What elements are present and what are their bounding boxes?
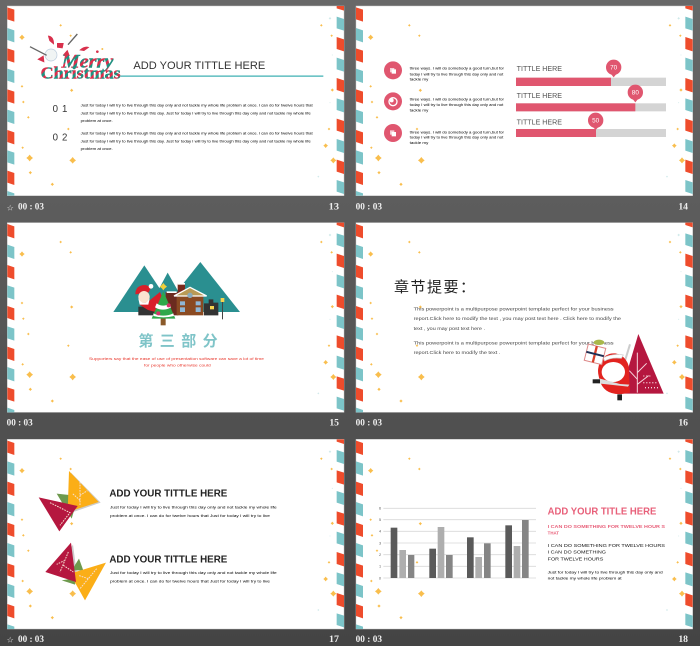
bar chart: 2 xyxy=(379,553,381,557)
bar chart: 4 xyxy=(379,530,381,534)
text block: capitals xyxy=(548,543,665,562)
text: item 2 xyxy=(410,98,505,112)
bar chart: 6 xyxy=(379,507,381,511)
text block: capitals: I CAN DO SOMETHING FOR TWELVE HOURS xyxy=(548,543,665,548)
bar 70: 70 xyxy=(610,65,618,72)
text block 1 xyxy=(110,506,277,518)
text: title 2: ADD YOUR TITTLE HERE xyxy=(109,554,228,565)
text: item 2: today I will try to live through this day only and not xyxy=(410,103,504,107)
footer: slide 18 xyxy=(356,634,689,644)
footer: slide 13: ☆ xyxy=(7,204,14,213)
pink subheading: THAT xyxy=(548,531,559,536)
text: item 1: today I will try to live through this day only and not xyxy=(410,72,504,76)
illustration: Santa with gift and triangle tree xyxy=(584,334,664,400)
slide 14: icons and progress bars xyxy=(356,6,693,212)
slide 17: two titled text blocks with triangles xyxy=(7,439,344,645)
heading: ADD YOUR TITLE HERE xyxy=(548,507,656,518)
text: item 1: tackle my xyxy=(410,78,428,82)
footer: slide 13: 13 xyxy=(329,202,340,212)
illustration: Santa, tree and houses under mountains xyxy=(113,262,240,325)
bar chart: 1 xyxy=(379,565,381,569)
bar 50: 50 xyxy=(592,118,600,125)
text block 02: Just for today I will try to live through this day only and not tackle my whole life problem at once. I can do for twelve hours that xyxy=(81,131,314,135)
pink subheading xyxy=(548,524,665,536)
bar chart: 0 xyxy=(379,576,381,580)
slide 15: section divider xyxy=(7,223,344,428)
text: item 3: three ways. I will do somebody a good turn,but for xyxy=(410,130,505,134)
slide 13: title and numbered list xyxy=(7,6,344,213)
text: item 3: today I will try to live through this day only and not xyxy=(410,136,504,140)
icon: pages xyxy=(384,124,402,142)
text: item 1: three ways. I will do somebody a good turn,but for xyxy=(410,67,505,71)
section subtitle: Supporters say that the ease of use of presentation software can save a lot of time xyxy=(89,357,264,361)
section subtitle: for people who otherwise could xyxy=(144,363,211,367)
number 02: 0 2 xyxy=(53,133,67,144)
bar 80 xyxy=(516,85,666,111)
footer: slide 13: 00 : 03 xyxy=(18,202,45,212)
heading: 章节提要： xyxy=(394,278,475,296)
bar chart xyxy=(379,507,536,580)
paragraph 1: report.Click here to modify the text , you may post text here . Click here to modify the xyxy=(414,316,622,321)
text: item 3 xyxy=(410,130,505,145)
paragraph 2: This powerpoint is a multipurpose powerpoint template perfect for your business xyxy=(414,340,614,345)
slide 16: chapter summary xyxy=(356,223,693,428)
slide 18: chart and text xyxy=(356,439,693,644)
text block 2 xyxy=(110,571,277,583)
bar 80: 80 xyxy=(632,90,639,97)
footer: slide 15: 15 xyxy=(329,418,340,428)
number 01: 0 1 xyxy=(53,104,67,115)
text block 02: Just for today I will try to live through this day. Just for today I will try to live through this day only and not tackle my whole life xyxy=(81,139,311,143)
icon: pages xyxy=(384,61,402,79)
footer: slide 17: 17 xyxy=(329,634,340,644)
footer: slide 16: 00 : 03 xyxy=(356,418,383,428)
footer: slide 17: ☆ xyxy=(7,636,14,645)
footer: slide 14: 00 : 03 xyxy=(356,202,383,212)
text block: capitals: FOR TWELVE HOURS xyxy=(548,557,603,562)
logo: Merry Christmas xyxy=(30,34,121,83)
text block 01: Just for today I will try to live through this day only and not tackle my whole life problem at once. I can do for twelve hours that xyxy=(81,104,314,108)
text block: body: Just for today I will try to live through this day only and xyxy=(548,571,663,575)
bar chart: progress bars xyxy=(516,60,666,137)
text: item 2: three ways. I will do somebody a good turn,but for xyxy=(410,98,505,102)
text block 01: Just for today I will try to live through this day. Just for today I will try to live through this day only and not tackle my whole life xyxy=(81,111,311,115)
bar 70 xyxy=(516,60,666,86)
bar 50 xyxy=(516,113,666,137)
text block: body: not tackle my whole life problem at xyxy=(548,577,623,581)
text block 1: problem at once. I can do for twelve hours that Just for today I will try to live xyxy=(110,514,270,518)
text block: body xyxy=(548,571,663,581)
text: item 2: tackle my xyxy=(410,108,428,112)
paragraph 1 xyxy=(414,306,622,331)
footer: slide 17: 00 : 03 xyxy=(18,634,45,644)
paragraph 2: report.Click here to modify the text . xyxy=(414,350,500,355)
icon: globe xyxy=(384,92,402,110)
footer: slide 18: 00 : 03 xyxy=(356,634,383,644)
footer: slide 14: 14 xyxy=(678,202,689,212)
bar chart: 3 xyxy=(379,541,381,545)
bar chart: 5 xyxy=(379,518,381,522)
footer: slide 14 xyxy=(356,202,689,212)
text block 01 xyxy=(81,104,314,123)
bar 70: TITTLE HERE xyxy=(517,64,562,73)
text: title 1: ADD YOUR TITTLE HERE xyxy=(109,489,228,500)
pink subheading: I CAN DO SOMETHING FOR TWELVE HOUR S xyxy=(548,524,665,529)
text: item 1 xyxy=(410,67,505,82)
logo: Merry Christmas: Merry xyxy=(61,52,114,73)
icon list xyxy=(384,61,505,145)
footer: slide 16: 16 xyxy=(678,418,689,428)
heading rule xyxy=(121,75,323,77)
paragraph 1: text , you may post text here . xyxy=(414,326,485,331)
footer: slide 18: 18 xyxy=(678,634,689,644)
illustration: triangle pair 1 xyxy=(39,471,101,531)
text block: capitals: I CAN DO SOMETHING xyxy=(548,550,606,555)
bar 80: TITTLE HERE xyxy=(517,91,562,100)
illustration: triangle pair 2 xyxy=(45,543,106,600)
text block 02 xyxy=(81,131,314,151)
bar 50: TITTLE HERE xyxy=(517,118,562,127)
footer: slide 16 xyxy=(356,418,689,428)
logo: Merry Christmas: Christmas xyxy=(41,64,121,83)
text block 2: Just for today I will try to live through this day only and not tackle my whole life xyxy=(110,571,277,575)
footer: slide 13 xyxy=(7,202,340,213)
text block 01: problem at once. xyxy=(81,119,113,123)
section subtitle xyxy=(89,357,264,367)
heading: ADD YOUR TITTLE HERE xyxy=(133,60,265,72)
text block 2: problem at once. I can do for twelve hours that Just for today I will try to live xyxy=(110,579,270,583)
paragraph 2 xyxy=(414,340,614,355)
text: item 3: tackle my xyxy=(410,141,428,145)
footer: slide 15: 00 : 03 xyxy=(7,418,33,428)
text block 02: problem at once. xyxy=(81,147,113,151)
section title: 第三部分 xyxy=(138,332,218,350)
footer: slide 15 xyxy=(7,418,340,428)
footer: slide 17 xyxy=(7,634,340,645)
paragraph 1: This powerpoint is a multipurpose powerpoint template perfect for your business xyxy=(414,306,614,311)
text block 1: Just for today I will try to live through this day only and not tackle my whole life xyxy=(110,506,277,510)
